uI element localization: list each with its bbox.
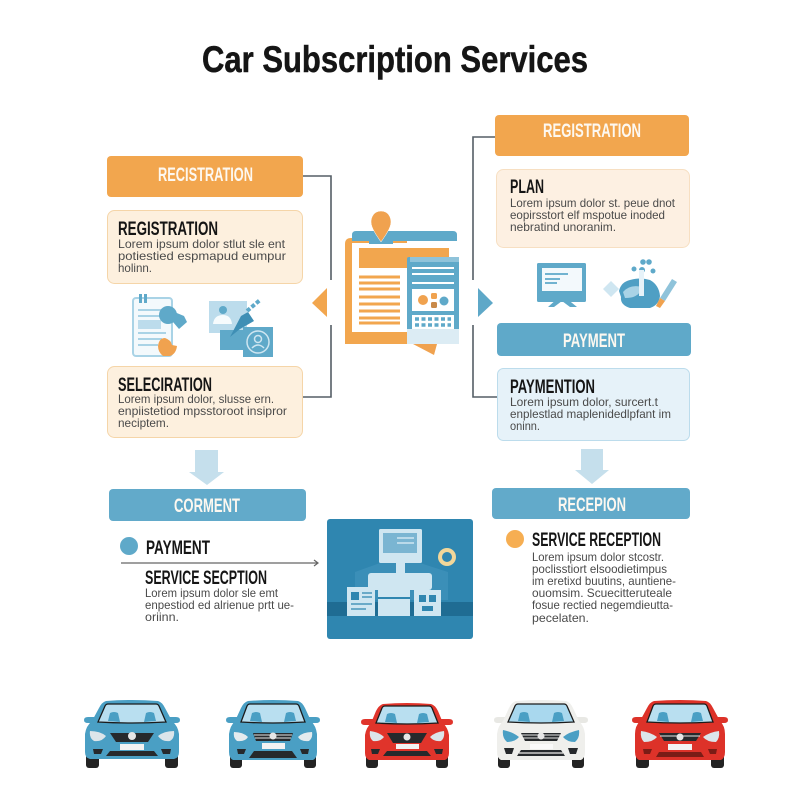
panel: payment card: PAYMENTION (510, 377, 595, 398)
panel: left registration card (108, 210, 302, 284)
arrow: right down (575, 449, 609, 484)
panel: payment header: PAYMENT (563, 331, 625, 352)
panel: comment header: CORMENT (174, 496, 240, 517)
panel: right plan card: nebratind unoranim. (510, 220, 616, 234)
panel: left selection card (108, 366, 302, 438)
panel: payment header (497, 323, 691, 356)
text block: service reception: fosue rectied negemdieutta- (532, 598, 673, 612)
panel: left registration card: potiestied espmapud eumpur (118, 249, 286, 263)
icon: blue car 1 (84, 700, 180, 768)
text block: payment and service section: PAYMENT (146, 538, 210, 559)
panel: payment card: Lorem ipsum dolor, surcert.t (510, 395, 659, 409)
text block: payment and service section: enpestiod ed alrienue prtt ue- (145, 598, 294, 612)
panel: right plan card: PLAN (510, 177, 544, 198)
icon: red car 5 (632, 700, 728, 768)
panel: right plan card: Lorem ipsum dolor st. peue dnot (510, 196, 676, 210)
arrow: left orange (312, 288, 327, 317)
text block: service reception: pecelaten. (532, 611, 589, 625)
icon: blue car 2 (226, 700, 320, 768)
panel: left registration card: Lorem ipsum dolor stlut sle ent (118, 237, 286, 251)
panel: left selection card: neciptem. (118, 416, 169, 430)
panel: payment card: oninn. (510, 419, 540, 433)
panel: left registration header (107, 156, 303, 197)
panel: reception header (492, 488, 690, 519)
icon: white car 4 (494, 700, 588, 768)
panel: reception header: RECEPION (558, 495, 626, 516)
panel: left registration card: holinn. (118, 261, 152, 275)
panel: comment header (109, 489, 306, 521)
left column connector (303, 176, 331, 397)
text block: service reception: poclisstiort elsoodietimpus (532, 562, 667, 576)
text block: service reception: SERVICE RECEPTION (532, 530, 661, 551)
icon: monitor (537, 263, 586, 307)
text block: service reception: im eretixd buutins, auntiene- (532, 574, 676, 588)
text block: service reception: Lorem ipsum dolor stcostr. (532, 550, 664, 564)
panel: right registration header (495, 115, 689, 156)
panel: right plan card (496, 170, 690, 248)
icon: central document and tablet (345, 211, 459, 355)
right column connector (473, 137, 497, 397)
icon: profile and pen (209, 300, 273, 357)
text block: service reception (506, 530, 676, 625)
panel: payment card: enplestlad maplenidedlpfant im (510, 407, 671, 421)
panel: blue service illustration (327, 519, 473, 639)
icon: red car 3 (361, 703, 453, 768)
title: Car Subscription Services (202, 39, 588, 80)
panel: left selection card: SELECIRATION (118, 375, 212, 396)
panel: left selection card: Lorem ipsum dolor, slusse ern. (118, 392, 274, 406)
panel: right plan card: eopirsstort elf mspotue inoded (510, 208, 665, 222)
text block: payment and service section (120, 537, 318, 624)
panel: right registration header: REGISTRATION (543, 121, 641, 142)
icon: flask and pen (603, 259, 677, 308)
text block: service reception: ouomsim. Scuecitteruteale (532, 586, 672, 600)
panel: left registration header: RECISTRATION (158, 165, 253, 186)
panel: payment card (498, 368, 690, 440)
text block: payment and service section: oriinn. (145, 610, 179, 624)
icon: document with key (133, 294, 187, 356)
text block: payment and service section: SERVICE SECPTION (145, 568, 267, 589)
arrow: left down (189, 450, 224, 485)
panel: left registration card: REGISTRATION (118, 219, 218, 240)
arrow: right blue (478, 288, 493, 317)
panel: left selection card: enpiistetiod mpsstoroot insipror (118, 404, 287, 418)
text block: payment and service section: Lorem ipsum dolor sle emt (145, 586, 279, 600)
